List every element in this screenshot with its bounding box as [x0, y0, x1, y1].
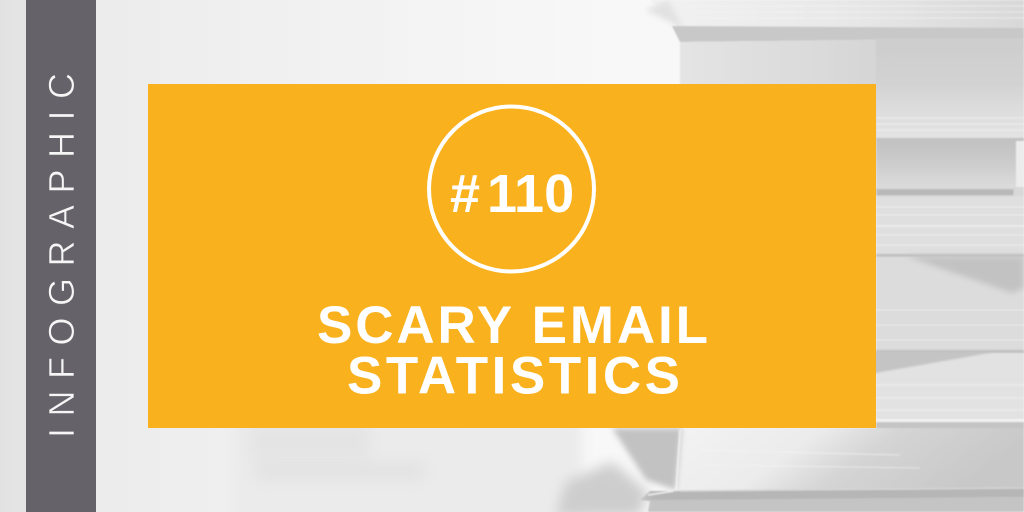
- heading: SCARY EMAIL: [317, 296, 708, 355]
- heading: [317, 296, 708, 406]
- panel: orange title card: [148, 84, 876, 428]
- badge circle with number: [429, 106, 594, 272]
- issue number: #: [450, 164, 480, 224]
- top book: [650, 0, 1024, 28]
- issue number: 110: [487, 164, 574, 224]
- lower book cover: [876, 422, 1024, 430]
- third book: [876, 138, 1024, 190]
- sixth book: [876, 353, 1024, 421]
- second book pages: [680, 38, 1024, 138]
- second book cover: [672, 26, 1024, 42]
- photo: stack of books: [556, 0, 1024, 512]
- sidebar label: INFOGRAPHIC: INFOGRAPHIC: [41, 73, 82, 438]
- bottom book: [640, 487, 1024, 501]
- page edge lines: [690, 6, 1024, 468]
- sidebar band: [26, 0, 96, 512]
- heading: STATISTICS: [347, 346, 680, 406]
- fifth book: [876, 257, 1024, 353]
- fourth book: [876, 196, 1024, 256]
